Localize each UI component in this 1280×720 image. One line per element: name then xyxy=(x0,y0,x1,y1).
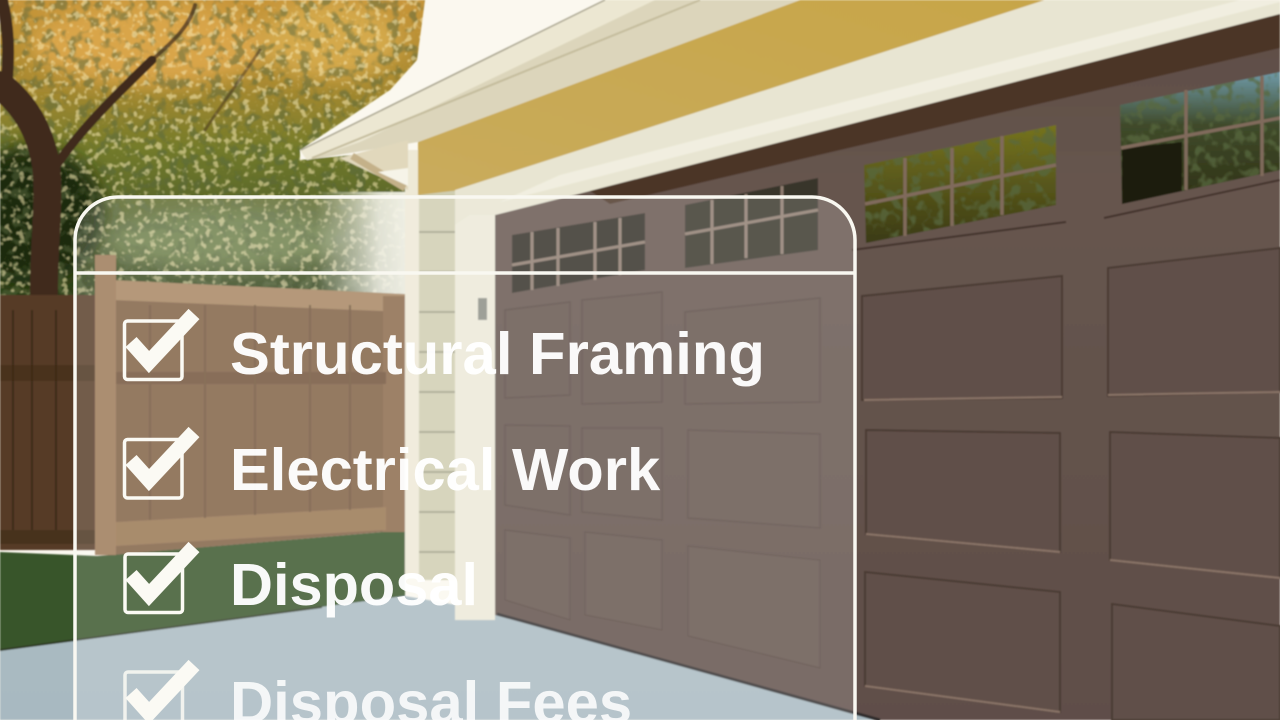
right door raised panels xyxy=(862,248,1280,720)
door bottom seal xyxy=(497,614,880,720)
fence: far section xyxy=(0,295,110,550)
driveway xyxy=(0,596,880,720)
roof eave xyxy=(300,0,800,190)
door top shadow band xyxy=(590,14,1280,204)
checklist item: Structural Framing: Structural Framing xyxy=(230,320,765,387)
lawn xyxy=(0,530,405,650)
tree foliage xyxy=(0,0,430,302)
tree trunk and branches xyxy=(0,0,260,292)
left door raised panels xyxy=(505,292,820,668)
house siding xyxy=(405,150,495,620)
right door windows xyxy=(852,70,1280,250)
fence: near section xyxy=(95,255,406,555)
garage door xyxy=(495,14,1280,720)
yellow gable wall xyxy=(418,0,1045,195)
right door panel highlights xyxy=(864,392,1280,712)
checklist item: Disposal: Disposal xyxy=(230,551,478,618)
glass panel overlay xyxy=(75,197,855,720)
checklist item: Disposal xyxy=(125,547,478,618)
checklist item: Electrical Work: Electrical Work xyxy=(230,436,661,503)
left door windows xyxy=(512,178,818,293)
white header beam xyxy=(455,0,1280,225)
